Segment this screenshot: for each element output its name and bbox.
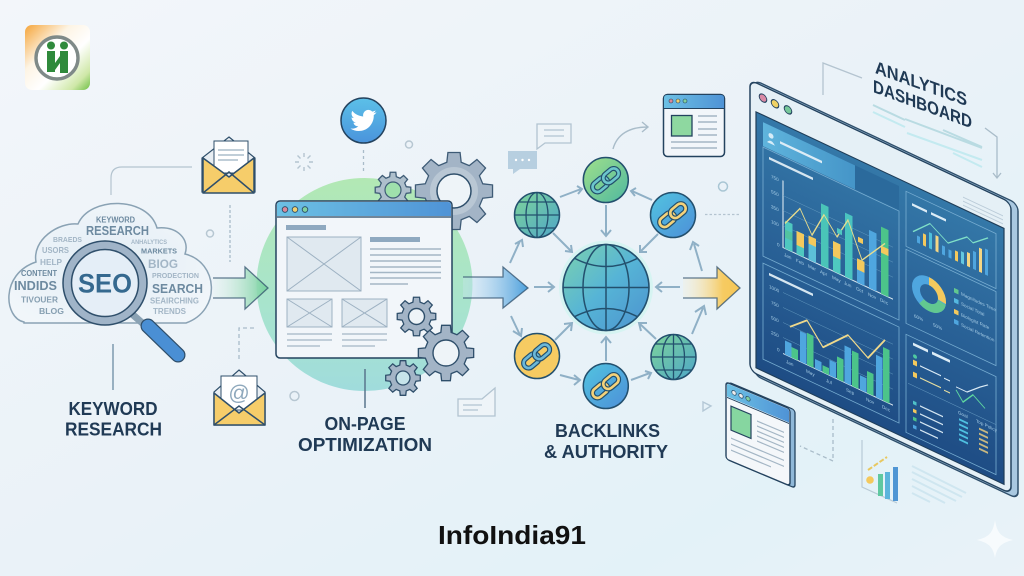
chart panel: bottom bars: Nov: [866, 397, 875, 407]
chart panel: top bars: Dec: [880, 297, 889, 307]
chart panel: bottom bars: 250: [771, 330, 779, 340]
sparkle: [977, 520, 1013, 558]
chart panel: donut: Social Total: [961, 301, 984, 318]
globe: lower right: [651, 334, 696, 380]
chart panel: metrics: Top Policy: [976, 418, 997, 434]
decorative ring: [406, 141, 412, 148]
keyword research cloud: BLOG: [39, 306, 64, 316]
icon: chat bubble filled: [508, 151, 537, 174]
heading: analytics dashboard: ANALYTICS: [875, 57, 967, 110]
header bar: [763, 122, 899, 210]
connector: envelope dashed: [229, 205, 231, 262]
decorative ring: [206, 230, 214, 237]
backlinks network arrows: [510, 186, 706, 385]
link node: upper right blue: [650, 192, 696, 238]
chart panel: top bars: Feb: [796, 258, 804, 267]
chart panel: top bars: 100: [771, 219, 779, 229]
heading: on-page optimization: OPTIMIZATION: [298, 435, 432, 455]
icon: small gear behind window: [375, 172, 411, 208]
stem: on-page: [364, 369, 366, 408]
icon: twitter: [341, 98, 386, 143]
keyword research cloud: TIVOUER: [21, 294, 58, 304]
text lines near trend chart: [912, 466, 966, 503]
heading: backlinks and authority: & AUTHORITY: [544, 442, 668, 462]
link node: top green: [583, 158, 628, 202]
keyword research cloud: [9, 203, 211, 323]
curved arrow to dashboard: [985, 128, 1001, 178]
heading: keyword research: [65, 399, 162, 440]
heading: analytics dashboard: DASHBOARD: [873, 76, 972, 132]
heading accent lines: [873, 105, 982, 148]
magnifying glass: [63, 241, 178, 355]
heading: on-page optimization: ON-PAGE: [324, 414, 406, 434]
heading accent lines lower: [873, 112, 982, 167]
heading: on-page optimization: [298, 414, 432, 455]
icon: envelope with letter: [202, 137, 255, 193]
chart panel: top bars: Jun: [844, 280, 852, 290]
chart panel: bottom bars: 500: [771, 315, 779, 325]
keyword research cloud: BIOG: [148, 257, 178, 271]
screen: [756, 112, 1004, 484]
connector: cloud to envelope: [111, 167, 192, 195]
keyword research cloud: CONTENT: [21, 269, 57, 278]
chart panel: mini bars: [906, 191, 996, 289]
keyword research cloud: KEYWORD: [96, 216, 135, 224]
keyword research cloud: RESEARCH: [86, 224, 149, 238]
heading: backlinks and authority: BACKLINKS: [555, 421, 660, 441]
chart panel: bottom bars: 0: [777, 347, 780, 354]
chart panel: bottom bars: Jul: [826, 378, 832, 386]
connector: lower envelope dashed: [239, 328, 254, 362]
chart panel: top bars: Oct: [856, 286, 864, 295]
icon: large gear behind window: [415, 152, 493, 230]
globe: central: [559, 240, 653, 334]
curved arrow to window: [613, 122, 648, 149]
icon: top-right small window: [664, 94, 724, 156]
keyword research cloud: ANHALYTICS: [131, 240, 167, 246]
stem: keyword research: [112, 344, 114, 390]
chart panel: top bars: May: [832, 275, 841, 285]
chart panel: donut: Magnitudes Time: [961, 291, 996, 314]
chart panel: donut: Biologist Rate: [961, 312, 990, 331]
chart panel: donut: Social Retention: [961, 322, 995, 344]
chart panel: top bars: 350: [771, 204, 779, 214]
icon: gear front 1: [397, 297, 436, 336]
panel: main web page window: [276, 201, 452, 358]
icon: gear front 2: [418, 325, 474, 381]
chart panel: top bars: Mar: [808, 263, 816, 273]
chart panel: top bars: 750: [771, 174, 779, 184]
chart panel: top bars: Apr: [820, 269, 828, 278]
chart panel: bottom bars: May: [806, 369, 815, 379]
chart panel: top bars: 550: [771, 189, 779, 199]
globe: upper left: [514, 192, 560, 238]
connector: twitter dashed: [362, 150, 364, 174]
heading: keyword research: KEYWORD: [68, 399, 158, 419]
seo label: SEO: [78, 268, 132, 298]
brand footer: InfoIndia91: [438, 520, 586, 550]
chart panel: top bars: Nov: [868, 292, 877, 301]
keyword research cloud: SEARCH: [152, 282, 203, 296]
heading: backlinks and authority: [544, 421, 668, 462]
link node: bottom blue: [583, 364, 628, 408]
heading: keyword research: RESEARCH: [65, 420, 162, 440]
chart panel: top bars: [763, 147, 899, 320]
decorative ring: [290, 392, 299, 400]
chart panel: bottom bars: [763, 263, 899, 423]
chart panel: bottom bars: 1000: [769, 284, 779, 295]
chart panel: bottom bars: 750: [771, 300, 779, 310]
keyword research cloud: USORS: [42, 245, 69, 255]
bracket near heading: [823, 63, 862, 95]
arrow: green: [213, 267, 268, 309]
keyword research cloud: INDIDS: [14, 279, 57, 293]
icon: envelope with at sign: [214, 370, 265, 425]
chart panel: donut: [906, 249, 996, 366]
chart panel: donut: 60%: [914, 313, 924, 324]
decorative triangle: [703, 402, 711, 411]
keyword research cloud: BRAEDS: [53, 235, 82, 244]
chart panel: metrics: [906, 334, 997, 475]
logo: [25, 25, 90, 90]
chart panel: top bars: Jan: [784, 252, 792, 261]
decorative ring: [718, 182, 728, 191]
arrow: blue: [463, 267, 528, 308]
chart panel: bottom bars: Dec: [882, 404, 891, 414]
icon: envelope with at sign: @: [228, 382, 250, 405]
small trend chart: [862, 440, 898, 503]
keyword research cloud: SEAIRCHING: [150, 296, 199, 306]
icon: comment note: [458, 388, 495, 416]
chart panel: metrics: Goal: [958, 410, 968, 420]
keyword research cloud: PRODECTION: [152, 271, 199, 280]
dashed connector: [705, 214, 740, 216]
decorative spark: [295, 153, 313, 171]
panel: analytics dashboard: [750, 78, 1018, 499]
chart panel: bottom bars: Sep: [846, 387, 854, 397]
keyword research cloud: MARKETS: [141, 246, 177, 256]
chart panel: bottom bars: Jan: [786, 359, 794, 368]
chart panel: top bars: 0: [777, 242, 780, 249]
icon: gear front 3: [386, 361, 420, 395]
keyword research cloud: TRENDS: [153, 307, 187, 316]
dashed connector: [800, 419, 833, 461]
note lines: [544, 130, 564, 136]
green circle backdrop: [256, 178, 472, 391]
keyword research cloud: HELP: [40, 257, 62, 267]
link node: lower left yellow: [514, 334, 560, 378]
arrow: yellow: [683, 267, 740, 309]
chart panel: donut: 50%: [933, 322, 943, 333]
icon: chat bubble outline: [537, 124, 571, 149]
icon: lower small window: [726, 381, 795, 488]
